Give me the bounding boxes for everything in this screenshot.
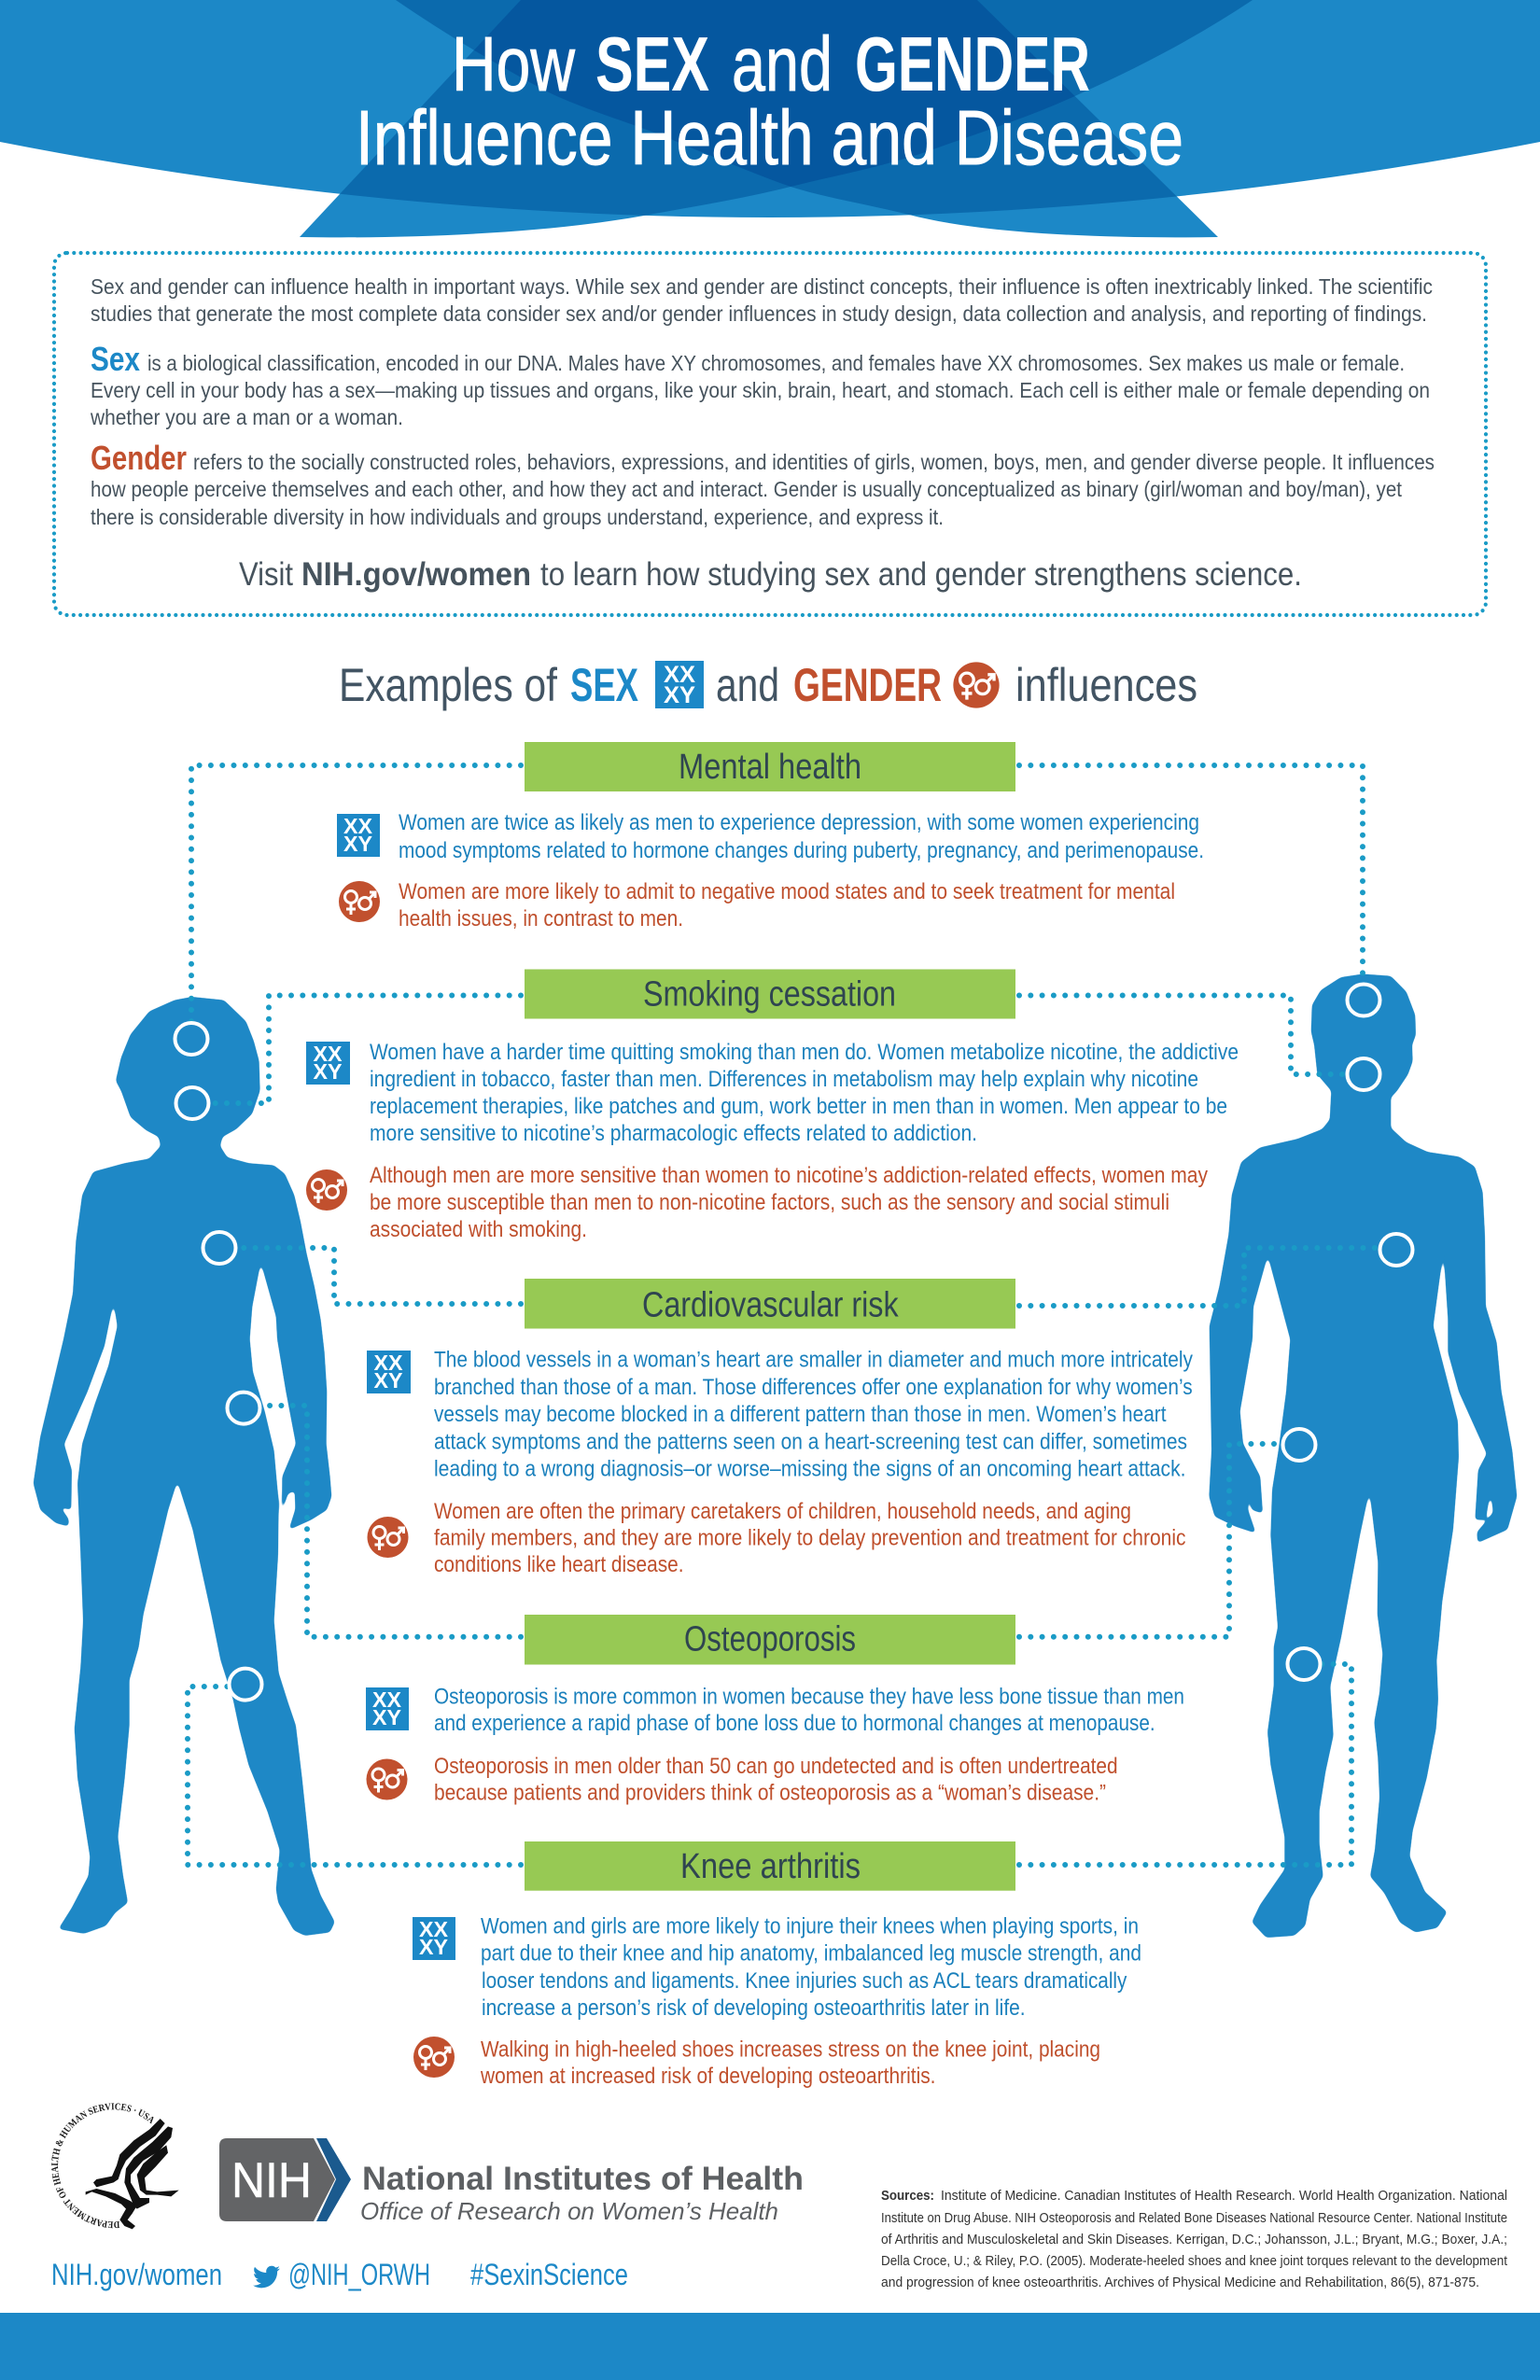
sex text: branched than those of a man. Those differences offer one explanation for why women’s	[434, 1375, 1193, 1400]
panel: osteoporosis	[366, 1615, 1184, 1805]
sex text: leading to a wrong diagnosis–or worse–missing the signs of an oncoming heart attack.	[434, 1456, 1185, 1482]
gender text	[434, 1754, 1118, 1805]
banner: osteoporosis: Osteoporosis	[684, 1620, 856, 1659]
sex text: The blood vessels in a woman’s heart are smaller in diameter and much more intricately	[434, 1348, 1193, 1373]
right wedge	[396, 0, 1218, 237]
sex text: attack symptoms and the patterns seen on a heart-screening test can differ, sometimes	[434, 1429, 1187, 1454]
banner: osteoporosis	[525, 1615, 1015, 1665]
connectors	[188, 765, 1379, 1865]
gender definition: there is considerable diversity in how individuals and groups understand, experience, and express it.	[91, 505, 944, 529]
panel: knee arthritis	[413, 1841, 1141, 2089]
footer links	[51, 2258, 628, 2291]
sex text: looser tendons and ligaments. Knee injuries such as ACL tears dramatically	[482, 1968, 1127, 1994]
icon: chromosomes: XX	[373, 1351, 403, 1375]
gender text	[434, 1499, 1185, 1577]
panel: cardiovascular risk	[367, 1279, 1193, 1577]
banner: smoking cessation: Smoking cessation	[643, 974, 896, 1014]
gender text	[399, 879, 1175, 931]
sex text	[434, 1684, 1184, 1736]
icon: chromosomes	[366, 1687, 409, 1730]
visit line: to learn how studying sex and gender strengthens science.	[540, 556, 1302, 593]
gender text: associated with smoking.	[370, 1217, 587, 1242]
header dome	[0, 0, 1540, 217]
heading: examples: influences	[1015, 659, 1197, 711]
sex definition	[90, 340, 1430, 429]
icon: chromosomes: XY	[372, 1705, 401, 1729]
gender text: Women are more likely to admit to negative mood states and to seek treatment for mental	[399, 879, 1175, 904]
panel: smoking cessation	[306, 969, 1239, 1242]
heading: examples	[339, 659, 1197, 711]
icon: chromosomes: XY	[664, 682, 695, 708]
markers: male body	[1282, 984, 1413, 1680]
gender text: Although men are more sensitive than women to nicotine’s addiction-related effects, women may	[370, 1163, 1208, 1188]
heading: examples: Examples of	[339, 659, 557, 711]
heading: examples: and	[716, 659, 779, 711]
title: GENDER	[855, 21, 1090, 107]
sex text: vessels may become blocked in a different pattern than those in men. Women’s heart	[434, 1402, 1167, 1427]
sex text	[399, 810, 1204, 863]
footer links: @NIH_ORWH	[288, 2258, 430, 2291]
logo: HHS seal: DEPARTMENT OF HEALTH & HUMAN SERVICES · USA	[51, 2103, 153, 2229]
icon: twitter bird	[253, 2266, 280, 2288]
title: How	[452, 21, 576, 107]
title: Influence Health and Disease	[356, 94, 1183, 181]
gender text	[480, 2037, 1100, 2089]
icon: chromosomes: XY	[343, 832, 372, 856]
sex text: ingredient in tobacco, faster than men. Differences in metabolism may help explain why nicotine	[370, 1067, 1198, 1092]
sources: Sources:	[881, 2188, 934, 2204]
icon: chromosomes: XY	[314, 1059, 342, 1084]
title: SEX	[595, 21, 709, 107]
banner: knee arthritis: Knee arthritis	[680, 1847, 861, 1886]
banner: cardiovascular risk: Cardiovascular risk	[642, 1286, 899, 1325]
panel: mental health	[337, 742, 1204, 931]
icon: chromosomes: XX	[372, 1687, 402, 1712]
sex text: Women are twice as likely as men to experience depression, with some women experiencing	[399, 810, 1199, 835]
sources: Institute of Medicine. Canadian Institutes of Health Research. World Health Organization. National	[941, 2188, 1507, 2204]
sex text: and experience a rapid phase of bone loss due to hormonal changes at menopause.	[434, 1711, 1155, 1736]
icon: chromosomes	[655, 661, 704, 708]
gender text: Walking in high-heeled shoes increases stress on the knee joint, placing	[481, 2037, 1100, 2063]
icon: gender symbols	[339, 881, 380, 922]
sex text	[481, 1914, 1141, 2021]
heading: examples: SEX	[570, 659, 638, 711]
footer band	[0, 2313, 1540, 2380]
banner: mental health: Mental health	[679, 748, 861, 787]
gender text: health issues, in contrast to men.	[399, 906, 683, 931]
icon: chromosomes	[306, 1042, 350, 1085]
figure: female silhouette	[34, 998, 334, 1935]
icon: chromosomes	[367, 1351, 411, 1393]
sex text: Women have a harder time quitting smoking than men do. Women metabolize nicotine, the addictive	[370, 1040, 1239, 1065]
sex text: mood symptoms related to hormone changes during puberty, pregnancy, and perimenopause.	[399, 838, 1204, 863]
footer links: #SexinScience	[470, 2258, 628, 2291]
logo: NIH	[219, 2138, 804, 2225]
banner: cardiovascular risk	[525, 1279, 1015, 1329]
gender text: be more susceptible than men to non-nicotine factors, such as the sensory and social stimuli	[370, 1190, 1169, 1215]
icon: gender symbols	[366, 1758, 407, 1799]
banner: mental health	[525, 742, 1015, 791]
visit line: NIH.gov/women	[301, 556, 531, 593]
icon: chromosomes: XX	[419, 1917, 449, 1941]
gender text: women at increased risk of developing osteoarthritis.	[480, 2064, 935, 2089]
icon: chromosomes: XX	[343, 814, 373, 838]
markers: female body	[175, 1023, 261, 1701]
title	[356, 21, 1183, 181]
gender definition	[91, 439, 1435, 529]
logo: NIH: Office of Research on Women’s Health	[360, 2197, 778, 2225]
gender text: family members, and they are more likely to delay prevention and treatment for chronic	[434, 1525, 1185, 1551]
sex text: Women and girls are more likely to injure their knees when playing sports, in	[481, 1914, 1139, 1939]
sex definition: whether you are a man or a woman.	[90, 405, 403, 429]
gender definition: Gender	[91, 439, 187, 477]
panel: definitions	[54, 253, 1486, 615]
wedge overlaps inside dome	[340, 0, 1253, 216]
gender text: Women are often the primary caretakers of children, household needs, and aging	[434, 1499, 1131, 1524]
sex text: more sensitive to nicotine’s pharmacologic effects related to addiction.	[370, 1121, 977, 1146]
header banner	[0, 0, 1540, 237]
gender text: because patients and providers think of osteoporosis as a “woman’s disease.”	[434, 1781, 1106, 1805]
icon: chromosomes	[337, 814, 380, 857]
sex definition: Sex	[91, 340, 140, 378]
gender text: Osteoporosis in men older than 50 can go undetected and is often undertreated	[434, 1754, 1118, 1779]
gender text: conditions like heart disease.	[434, 1552, 683, 1577]
banner: smoking cessation	[525, 969, 1015, 1019]
icon: gender symbols	[413, 2037, 455, 2078]
title: and	[732, 21, 833, 107]
icon: gender symbols	[953, 662, 1000, 708]
gender text	[370, 1163, 1208, 1242]
icon: chromosomes: XX	[664, 662, 695, 688]
icon: chromosomes: XY	[373, 1368, 403, 1393]
sex text: replacement therapies, like patches and gum, work better in men than in women. Men appear to be	[370, 1094, 1227, 1119]
sex text	[434, 1348, 1193, 1482]
visit line: Visit	[239, 556, 293, 593]
sources	[881, 2188, 1508, 2290]
footer links: NIH.gov/women	[51, 2258, 222, 2291]
intro text	[91, 274, 1433, 326]
icon: gender symbols	[368, 1517, 409, 1558]
sources: and progression of knee osteoarthritis. Archives of Physical Medicine and Rehabilitation, 86(5), 871-875.	[881, 2275, 1479, 2290]
sex text: part due to their knee and hip anatomy, imbalanced leg muscle strength, and	[481, 1941, 1141, 1967]
sex text: Osteoporosis is more common in women because they have less bone tissue than men	[434, 1684, 1184, 1709]
banner: knee arthritis	[525, 1841, 1015, 1891]
icon: chromosomes	[413, 1917, 455, 1960]
logo: NIH: NIH	[231, 2153, 312, 2208]
heading: examples: GENDER	[793, 659, 942, 711]
logo: NIH: National Institutes of Health	[362, 2161, 804, 2197]
figure: male silhouette	[1210, 974, 1517, 1937]
icon: chromosomes: XX	[314, 1042, 343, 1066]
sex text: increase a person’s risk of developing osteoarthritis later in life.	[482, 1995, 1026, 2021]
icon: gender symbols	[306, 1169, 347, 1211]
left wedge	[300, 0, 1253, 237]
sex text	[370, 1040, 1239, 1146]
visit line	[239, 556, 1302, 593]
icon: chromosomes: XY	[419, 1935, 448, 1959]
